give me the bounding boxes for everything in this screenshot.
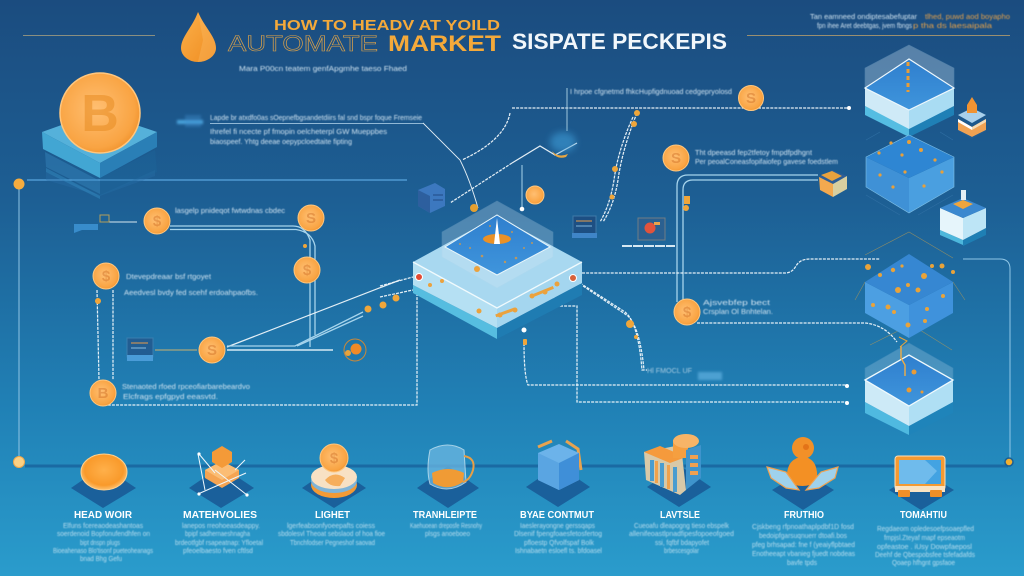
icon: orange chest bbox=[819, 170, 847, 197]
title bbox=[228, 18, 727, 56]
step 7: FRUTHIO bbox=[784, 509, 824, 521]
step 4 bbox=[410, 445, 482, 538]
coin: S bbox=[306, 210, 316, 227]
icon: orbit coin bbox=[344, 339, 366, 361]
step 3: lgerfeabsonfyoeepafts coiess bbox=[287, 521, 375, 530]
text block: left lower label: Stenaoted rfoed rpceofiarbarebeardvo bbox=[122, 382, 250, 391]
step 2: bpipf sadhernaeshnagha bbox=[185, 529, 251, 538]
title: AUTOMATE bbox=[228, 31, 378, 56]
top right note: fpn ihee Aret deebtgas, jvem fbngs bbox=[817, 21, 912, 30]
icon: server block bbox=[418, 183, 445, 213]
step 6: brbescesgolar bbox=[664, 546, 699, 555]
step 1 bbox=[53, 454, 153, 563]
coin bbox=[90, 380, 116, 406]
top right note: p tha ds laesaipala bbox=[913, 23, 992, 30]
top right note: Tan eamneed ondiptesabefuptar bbox=[810, 12, 917, 21]
step 7 bbox=[752, 437, 855, 567]
text block: top center label: I hrpoe cfgnetmd fhkcHupfigdnuoad cedgepryolosd bbox=[570, 87, 732, 96]
icon: small white box bbox=[940, 190, 986, 246]
icon: blue smudge bbox=[177, 115, 203, 127]
icon: blue mini device bbox=[74, 215, 109, 233]
text block: top intro: Lapde br atxdfo0as sOepnefbgsandetdiirs fal snd bspr foque Fremseie bbox=[210, 113, 422, 122]
step 4: TRANHLEIPTE bbox=[413, 509, 477, 521]
text block: right top label: Per peoalConeasfopifaiofep gavese foedstlem bbox=[695, 157, 838, 166]
top right note bbox=[810, 12, 1010, 30]
coin bbox=[298, 205, 324, 231]
step 3: Tbnchfodser Pegneshof saovad bbox=[290, 538, 375, 547]
marker: left bottom dot bbox=[14, 456, 24, 468]
text block: top intro: Ihrefel fi ncecte pf fmopin oelcheterpl GW Mueppbes bbox=[210, 127, 387, 136]
text block: right top label: Tht dpeeasd fep2tfetoy fmpdfpdhgnt bbox=[695, 148, 813, 157]
central liquidity pool block bbox=[413, 201, 582, 339]
step 1: HEAD WOIR bbox=[74, 509, 132, 521]
title: SISPATE PECKEPIS bbox=[512, 29, 727, 54]
step 5: BYAE CONTMUT bbox=[520, 509, 595, 521]
coin bbox=[674, 299, 700, 325]
coins bbox=[90, 86, 764, 406]
icon: big bitcoin on platform bbox=[42, 73, 157, 199]
step 8: Regdaeom opledesoefpsoaepfled bbox=[877, 524, 974, 533]
step 8: fmpjsl.Zteyaf mapf epseaotm bbox=[884, 533, 965, 542]
coin bbox=[663, 145, 689, 171]
step 3 bbox=[278, 444, 385, 547]
text block: right middle label bbox=[703, 298, 773, 316]
icon: small orange stack bbox=[958, 97, 986, 139]
step 7: pfeg brhsapad: fne f (yeaiyflpbtaed bbox=[752, 540, 855, 549]
stacked pool box 4 bbox=[865, 343, 953, 435]
step 7: Cjskbeng rfpnoathaplpdbf1D fosd bbox=[752, 522, 854, 531]
step 2: pfeoelbaesto fven cftlsd bbox=[183, 546, 253, 555]
icon: orange drop bbox=[181, 12, 216, 62]
coin: $ bbox=[102, 268, 111, 285]
text block: top intro: biaospeef. Yhtg deeae oepypcloedtaite fipting bbox=[210, 137, 352, 146]
step 3: LIGHET bbox=[315, 509, 351, 521]
header rule right bbox=[747, 34, 1010, 36]
text block: left lower label: Elcfrags epfgpyd eeasvtd. bbox=[123, 392, 218, 401]
step 6: Cueoafu dleapogng tieso ebspelk bbox=[634, 521, 729, 530]
icon: left card bbox=[127, 338, 153, 361]
text block: right middle label: Crsplan Ol Bnhtelan. bbox=[703, 307, 773, 316]
text block: right middle label: Ajsvebfep bect bbox=[703, 298, 771, 307]
step 1: bnad Bhg Gefu bbox=[80, 554, 122, 563]
coin: S bbox=[746, 90, 756, 107]
step 8: Qoaep hfhgnt gpsfaoe bbox=[892, 558, 955, 567]
step 2: lanepos rreohoeasdeappy. bbox=[182, 521, 260, 530]
text block: right top label bbox=[695, 148, 838, 166]
step 6: LAVTSLE bbox=[660, 509, 700, 521]
step 8: TOMAHTIU bbox=[900, 509, 947, 521]
stacked pool box 2 bbox=[866, 132, 954, 215]
step 7: Enotheeapt vbanieg fjuedt nobdeas bbox=[752, 549, 855, 558]
icon: big bitcoin on platform: B bbox=[81, 85, 119, 143]
text block: top intro bbox=[210, 113, 422, 146]
coin bbox=[294, 257, 320, 283]
coin bbox=[199, 337, 225, 363]
header rule left bbox=[23, 34, 155, 36]
text block: left lower label bbox=[122, 382, 250, 401]
icon: blue glow bbox=[550, 132, 576, 152]
step 5: Iaeslerayongne gerssqaps bbox=[520, 521, 595, 530]
step 5: Dlsenif fpengfoaesfetosfertog bbox=[514, 529, 602, 538]
text block: left middle label: Aeedvesl bvdy fed scehf erdoahpaofbs. bbox=[124, 288, 258, 297]
coin bbox=[526, 186, 544, 204]
step 7: bedoipfgarsuqnuerr dtoafi.bos bbox=[759, 531, 847, 540]
title: MARKET bbox=[388, 31, 502, 56]
coin: S bbox=[671, 150, 681, 167]
step 6: allenifeoastlpnadfipesfopoeofgoed bbox=[629, 529, 734, 538]
step 8: opfeastoe . iUsy Dowpfaeposl bbox=[877, 542, 972, 551]
step 3: $ bbox=[330, 450, 339, 467]
title: HOW TO HEADV AT YOILD bbox=[274, 18, 500, 34]
step 5: pfloestp Qfvolfspaf Bolk bbox=[524, 538, 594, 547]
step 4: plsgs anoeboeo bbox=[425, 529, 470, 538]
step 2 bbox=[175, 446, 263, 555]
step 8: Deehf de Qbespobsfee tsfefadafds bbox=[875, 550, 975, 559]
text block: left middle label bbox=[124, 272, 258, 297]
marker: left top dot bbox=[14, 178, 24, 190]
coin bbox=[144, 208, 170, 234]
step 5: Ishnabaetn esloefl ts. bfdoasel bbox=[515, 546, 602, 555]
step 2: brdeotfgbf rsapeatnap: Yfloetal bbox=[175, 538, 263, 547]
icon: red alert panel bbox=[638, 218, 665, 240]
top right note: tlhed, puwd aod boyapho bbox=[925, 14, 1010, 21]
text block: small flow label: Hl FMOCL UF bbox=[647, 366, 692, 375]
icon: dashboard card bbox=[572, 216, 597, 238]
step 8 bbox=[875, 456, 975, 567]
step 1: Elfuns fcereaodeashantoas bbox=[63, 521, 143, 530]
icon: blue smudge lower bbox=[698, 372, 722, 380]
coin: S bbox=[207, 342, 217, 359]
stacked pool box 1 bbox=[865, 45, 954, 137]
coin bbox=[738, 86, 764, 110]
step 6: ssi, fqfbf bdapyofet bbox=[655, 538, 710, 547]
coin bbox=[93, 263, 119, 289]
step 7: bavfe tpds bbox=[787, 558, 817, 567]
stacked pool box 3 bbox=[855, 232, 965, 350]
step 1: Bioeahenaso Blo'tisonf pueteoheanags bbox=[53, 546, 153, 555]
text block: left middle label: Dtevepdreaar bsf rtgoyet bbox=[126, 272, 212, 281]
flow lines bbox=[19, 88, 1010, 466]
subtitle: Mara P00cn teatem genfApgmhe taeso Fhaed bbox=[239, 64, 407, 73]
text block: left upper label: lasgelp pnideqot fwtwdnas cbdec bbox=[175, 206, 285, 215]
coin: $ bbox=[683, 304, 692, 321]
step 5 bbox=[514, 441, 602, 555]
step 1: bipt dnspn plugs bbox=[80, 538, 120, 547]
step 6 bbox=[629, 434, 734, 555]
coin: $ bbox=[303, 262, 312, 279]
marker: right bottom dot bbox=[1005, 458, 1013, 466]
step 1: soerdenoid Bopfonufendhfen on bbox=[57, 529, 150, 538]
small flow tokens bbox=[95, 110, 690, 345]
step 2: MATEHVOLIES bbox=[183, 509, 257, 521]
step 3: sbdolesvl Theoat sebslaod of hoa fioe bbox=[278, 529, 385, 538]
step 4: Kaehuoean dreposfe Resnohy bbox=[410, 521, 482, 530]
coin: B bbox=[98, 385, 109, 402]
coin: $ bbox=[153, 213, 162, 230]
